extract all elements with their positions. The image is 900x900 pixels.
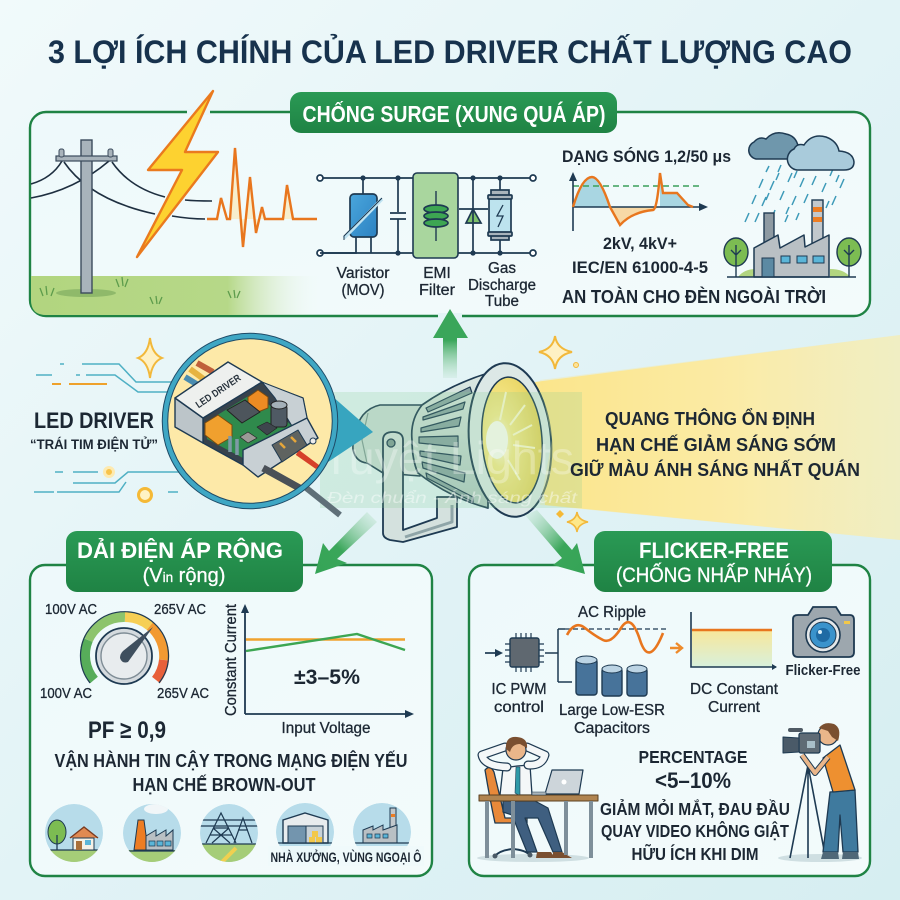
- gauge: [40, 602, 209, 702]
- dark cable: [272, 468, 301, 490]
- PWM circuit: AC Ripple: [578, 604, 646, 621]
- line chart: constant current vs input voltage: [223, 603, 414, 737]
- icon: utility pole with wires: [31, 140, 240, 304]
- circuit labels: Filter: [419, 282, 455, 299]
- icon: warehouse: [276, 803, 334, 846]
- gauge: 100V AC: [45, 602, 97, 618]
- circuit labels: Discharge: [468, 277, 536, 294]
- ground strip: [31, 276, 320, 315]
- surge specs: IEC/EN 61000-4-5: [572, 259, 708, 277]
- circuit labels: [336, 260, 536, 310]
- circuit labels: Varistor: [336, 265, 390, 282]
- surge specs: 2kV, 4kV+: [603, 235, 677, 253]
- heatsink fins: [419, 387, 473, 502]
- back wall: [262, 382, 307, 426]
- icon: power plant: [123, 804, 181, 864]
- varistor: [344, 194, 382, 240]
- watermark: [320, 392, 582, 508]
- heading pill: voltage: [66, 531, 303, 592]
- benefits text next to beam: GIỮ MÀU ÁNH SÁNG NHẤT QUÁN: [570, 459, 860, 480]
- icon: suburban factory: [353, 803, 411, 846]
- beam overlap on rim: [540, 335, 900, 540]
- circuit labels: Gas: [488, 260, 516, 277]
- icon: power towers: [200, 804, 258, 864]
- circuit board: [206, 392, 292, 458]
- icon: factory with trees: [724, 200, 861, 277]
- bracket: [383, 432, 457, 542]
- summary text: GIẢM MỎI MẮT, ĐAU ĐẦU: [600, 798, 790, 819]
- caption: [268, 846, 424, 866]
- torso: [500, 765, 532, 795]
- circuit labels: EMI: [423, 265, 451, 282]
- power factor: PF ≥ 0,9: [88, 717, 166, 744]
- laptop: [545, 770, 583, 794]
- surge specs: AN TOÀN CHO ĐÈN NGOÀI TRỜI: [562, 286, 826, 307]
- icon: storm clouds and rain: [745, 133, 854, 222]
- LED driver label: LED DRIVER: [34, 408, 154, 433]
- reliability text: [54, 750, 408, 795]
- interior frame: [203, 382, 307, 465]
- PWM circuit: [485, 604, 667, 716]
- illustration: cameraman: [778, 723, 862, 862]
- DC current chart: [690, 612, 779, 716]
- PWM circuit: IC PWM: [492, 681, 546, 698]
- line chart: constant current vs input voltage: ±3–5%: [294, 666, 360, 689]
- panel: flicker free: [469, 565, 870, 876]
- icon: circuit traces and sparkle, left: [34, 338, 180, 502]
- LED driver label: “TRÁI TIM ĐIỆN TỬ”: [30, 437, 158, 452]
- capacitors: Large Low-ESR: [559, 702, 665, 719]
- reliability text: VẬN HÀNH TIN CẬY TRONG MẠNG ĐIỆN YẾU: [54, 750, 408, 771]
- capacitors: Capacitors: [574, 720, 650, 737]
- desk: [479, 795, 598, 801]
- summary text: PERCENTAGE: [638, 747, 748, 767]
- icon: magnified LED driver: [165, 336, 373, 515]
- PWM circuit: control: [494, 699, 544, 716]
- heading pill: voltage: (Vin rộng): [143, 565, 225, 587]
- summary text: QUAY VIDEO KHÔNG GIẬT: [601, 820, 789, 841]
- icon: house: [45, 804, 103, 864]
- line chart: constant current vs input voltage: Constant Current: [223, 603, 240, 716]
- line chart: constant current vs input voltage: Input Voltage: [282, 720, 370, 737]
- chair: [485, 767, 527, 823]
- waveform heading: DẠNG SÓNG 1,2/50 μs: [562, 147, 731, 166]
- title: 3 LỢI ÍCH CHÍNH CỦA LED DRIVER CHẤT LƯỢNG CAO: [48, 34, 852, 70]
- icon: camera: [786, 607, 860, 679]
- outgoing cable: [305, 487, 340, 515]
- heatsink: [412, 373, 488, 508]
- diode: [459, 178, 488, 253]
- heading pill: flicker: (CHỐNG NHẤP NHÁY): [616, 563, 812, 587]
- benefits text next to beam: HẠN CHẾ GIẢM SÁNG SỚM: [596, 434, 836, 455]
- summary text: [600, 747, 790, 864]
- EMI filter: [413, 173, 458, 258]
- waveform chart: [569, 172, 708, 231]
- arms: [482, 747, 545, 767]
- neck: [353, 405, 425, 476]
- DC current chart: DC Constant: [690, 681, 779, 698]
- icon: magnified LED driver: LED DRIVER: [194, 372, 244, 411]
- surge pulse line: [207, 148, 317, 247]
- arrow: up to surge panel: [433, 309, 468, 378]
- benefits text next to beam: [570, 408, 860, 480]
- gauge: 265V AC: [154, 602, 206, 618]
- side wall: [175, 398, 203, 443]
- heading pill: voltage: DẢI ĐIỆN ÁP RỘNG: [77, 538, 283, 563]
- connector: [272, 430, 307, 462]
- gas discharge tube: [488, 178, 512, 253]
- arrow: down right to flicker panel: [525, 510, 585, 574]
- arrow: down left to voltage panel: [315, 512, 377, 574]
- summary text: <5–10%: [655, 768, 731, 793]
- end wall: [243, 418, 318, 477]
- arrow: orange: [670, 643, 682, 653]
- heading pill: surge: [290, 92, 617, 133]
- capacitors: [559, 656, 665, 737]
- DC current chart: Current: [708, 699, 761, 716]
- watermark: Tuyệt Lights: [322, 432, 574, 484]
- legs: [503, 801, 562, 852]
- red wire: [297, 453, 317, 467]
- heading pill: flicker: FLICKER-FREE: [639, 538, 789, 563]
- icon: lightning bolt: [137, 91, 218, 257]
- reliability text: HẠN CHẾ BROWN-OUT: [132, 774, 316, 795]
- callout tail: [328, 396, 373, 462]
- sparkles near lamp: [539, 336, 588, 532]
- circuit labels: Tube: [485, 293, 519, 310]
- icon: spotlight lamp: [353, 360, 558, 542]
- panel: surge protection: [30, 91, 870, 319]
- summary text: HỮU ÍCH KHI DIM: [632, 843, 758, 864]
- circuit labels: (MOV): [342, 282, 384, 299]
- LED driver label: [30, 408, 158, 452]
- surge specs: [562, 235, 826, 307]
- capacitor: [390, 178, 406, 253]
- light beam: [535, 335, 900, 540]
- heading pill: flicker: [594, 531, 832, 592]
- circuit diagram: [317, 173, 536, 258]
- watermark: Đèn chuẩn - Ánh sáng chất: [327, 488, 578, 507]
- label lid: [175, 362, 262, 418]
- rim: [462, 360, 558, 520]
- panel: wide voltage range: NHÀ XƯỞNG, VÙNG NGOẠI Ô: [270, 850, 422, 865]
- heading pill: surge: CHỐNG SURGE (XUNG QUÁ ÁP): [302, 100, 606, 127]
- illustration: relaxed office worker: [477, 737, 598, 862]
- gauge: 265V AC: [157, 686, 209, 702]
- gauge: 100V AC: [40, 686, 92, 702]
- benefits text next to beam: QUANG THÔNG ỔN ĐỊNH: [605, 408, 815, 429]
- panel: wide voltage range: [30, 565, 432, 876]
- components: [205, 415, 232, 445]
- icon: camera: Flicker-Free: [786, 663, 860, 679]
- lens: [478, 375, 546, 505]
- head: [506, 740, 526, 760]
